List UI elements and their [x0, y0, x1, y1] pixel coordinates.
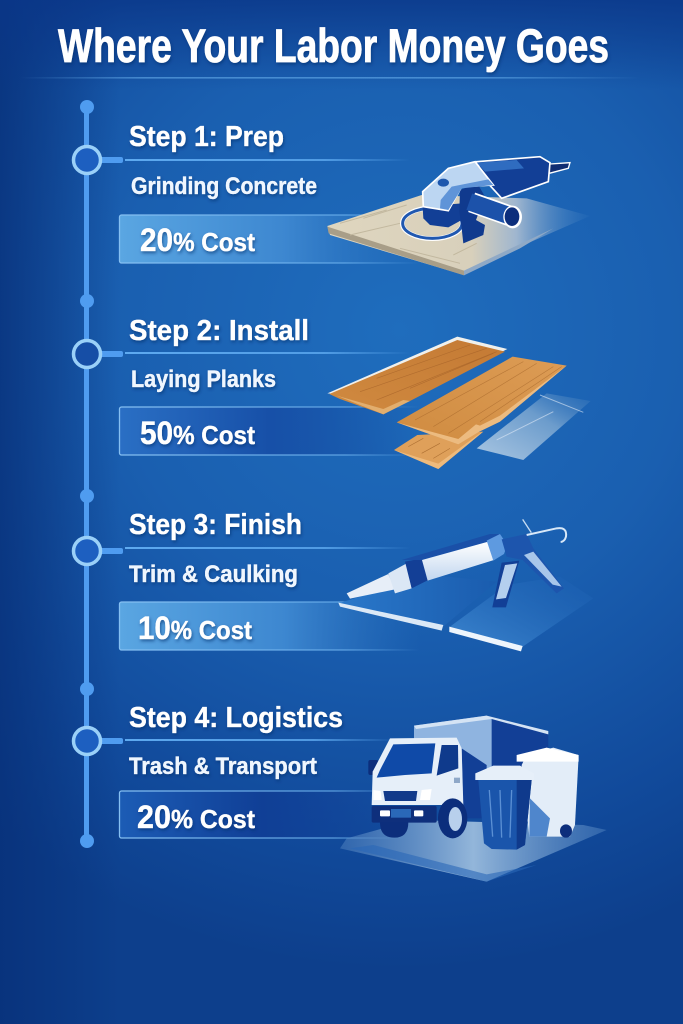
panel: step 2 install: [74, 315, 591, 469]
step 3 cost bar: 10% Cost: [138, 610, 252, 646]
step 3 node: [74, 538, 123, 564]
timeline: [80, 100, 94, 848]
step 3 cost bar: [120, 602, 420, 650]
step 1 heading: Step 1: Prep: [129, 121, 284, 153]
step 2 cost bar: 50% Cost: [140, 415, 255, 451]
step 4 description: Trash & Transport: [129, 753, 317, 780]
panel: step 4 logistics: [74, 702, 607, 882]
step 2 cost bar: [120, 407, 420, 455]
panel: step 1 prep: [74, 121, 590, 275]
icon: truck and trash bins: [340, 716, 607, 882]
step 1 cost bar: 20% Cost: [140, 222, 255, 258]
step 3 heading: Step 3: Finish: [129, 509, 302, 541]
step 2 description: Laying Planks: [131, 366, 276, 393]
step 2 node: [74, 340, 123, 368]
icon: angle grinder on concrete slab: [327, 157, 590, 275]
step 1 cost bar: [120, 215, 420, 263]
step 2 heading: Step 2: Install: [129, 315, 309, 347]
step 4 node: [74, 728, 123, 754]
icon: wood planks: [327, 337, 591, 469]
panel: step 3 finish: [74, 509, 593, 651]
icon: caulking gun on boards: [338, 519, 593, 651]
step 3 description: Trim & Caulking: [129, 561, 298, 588]
step 1 description: Grinding Concrete: [131, 173, 317, 200]
step 1 node: [74, 146, 123, 174]
step 4 heading: Step 4: Logistics: [129, 702, 343, 734]
step 4 cost bar: [120, 791, 404, 838]
step 4 cost bar: 20% Cost: [137, 799, 255, 835]
